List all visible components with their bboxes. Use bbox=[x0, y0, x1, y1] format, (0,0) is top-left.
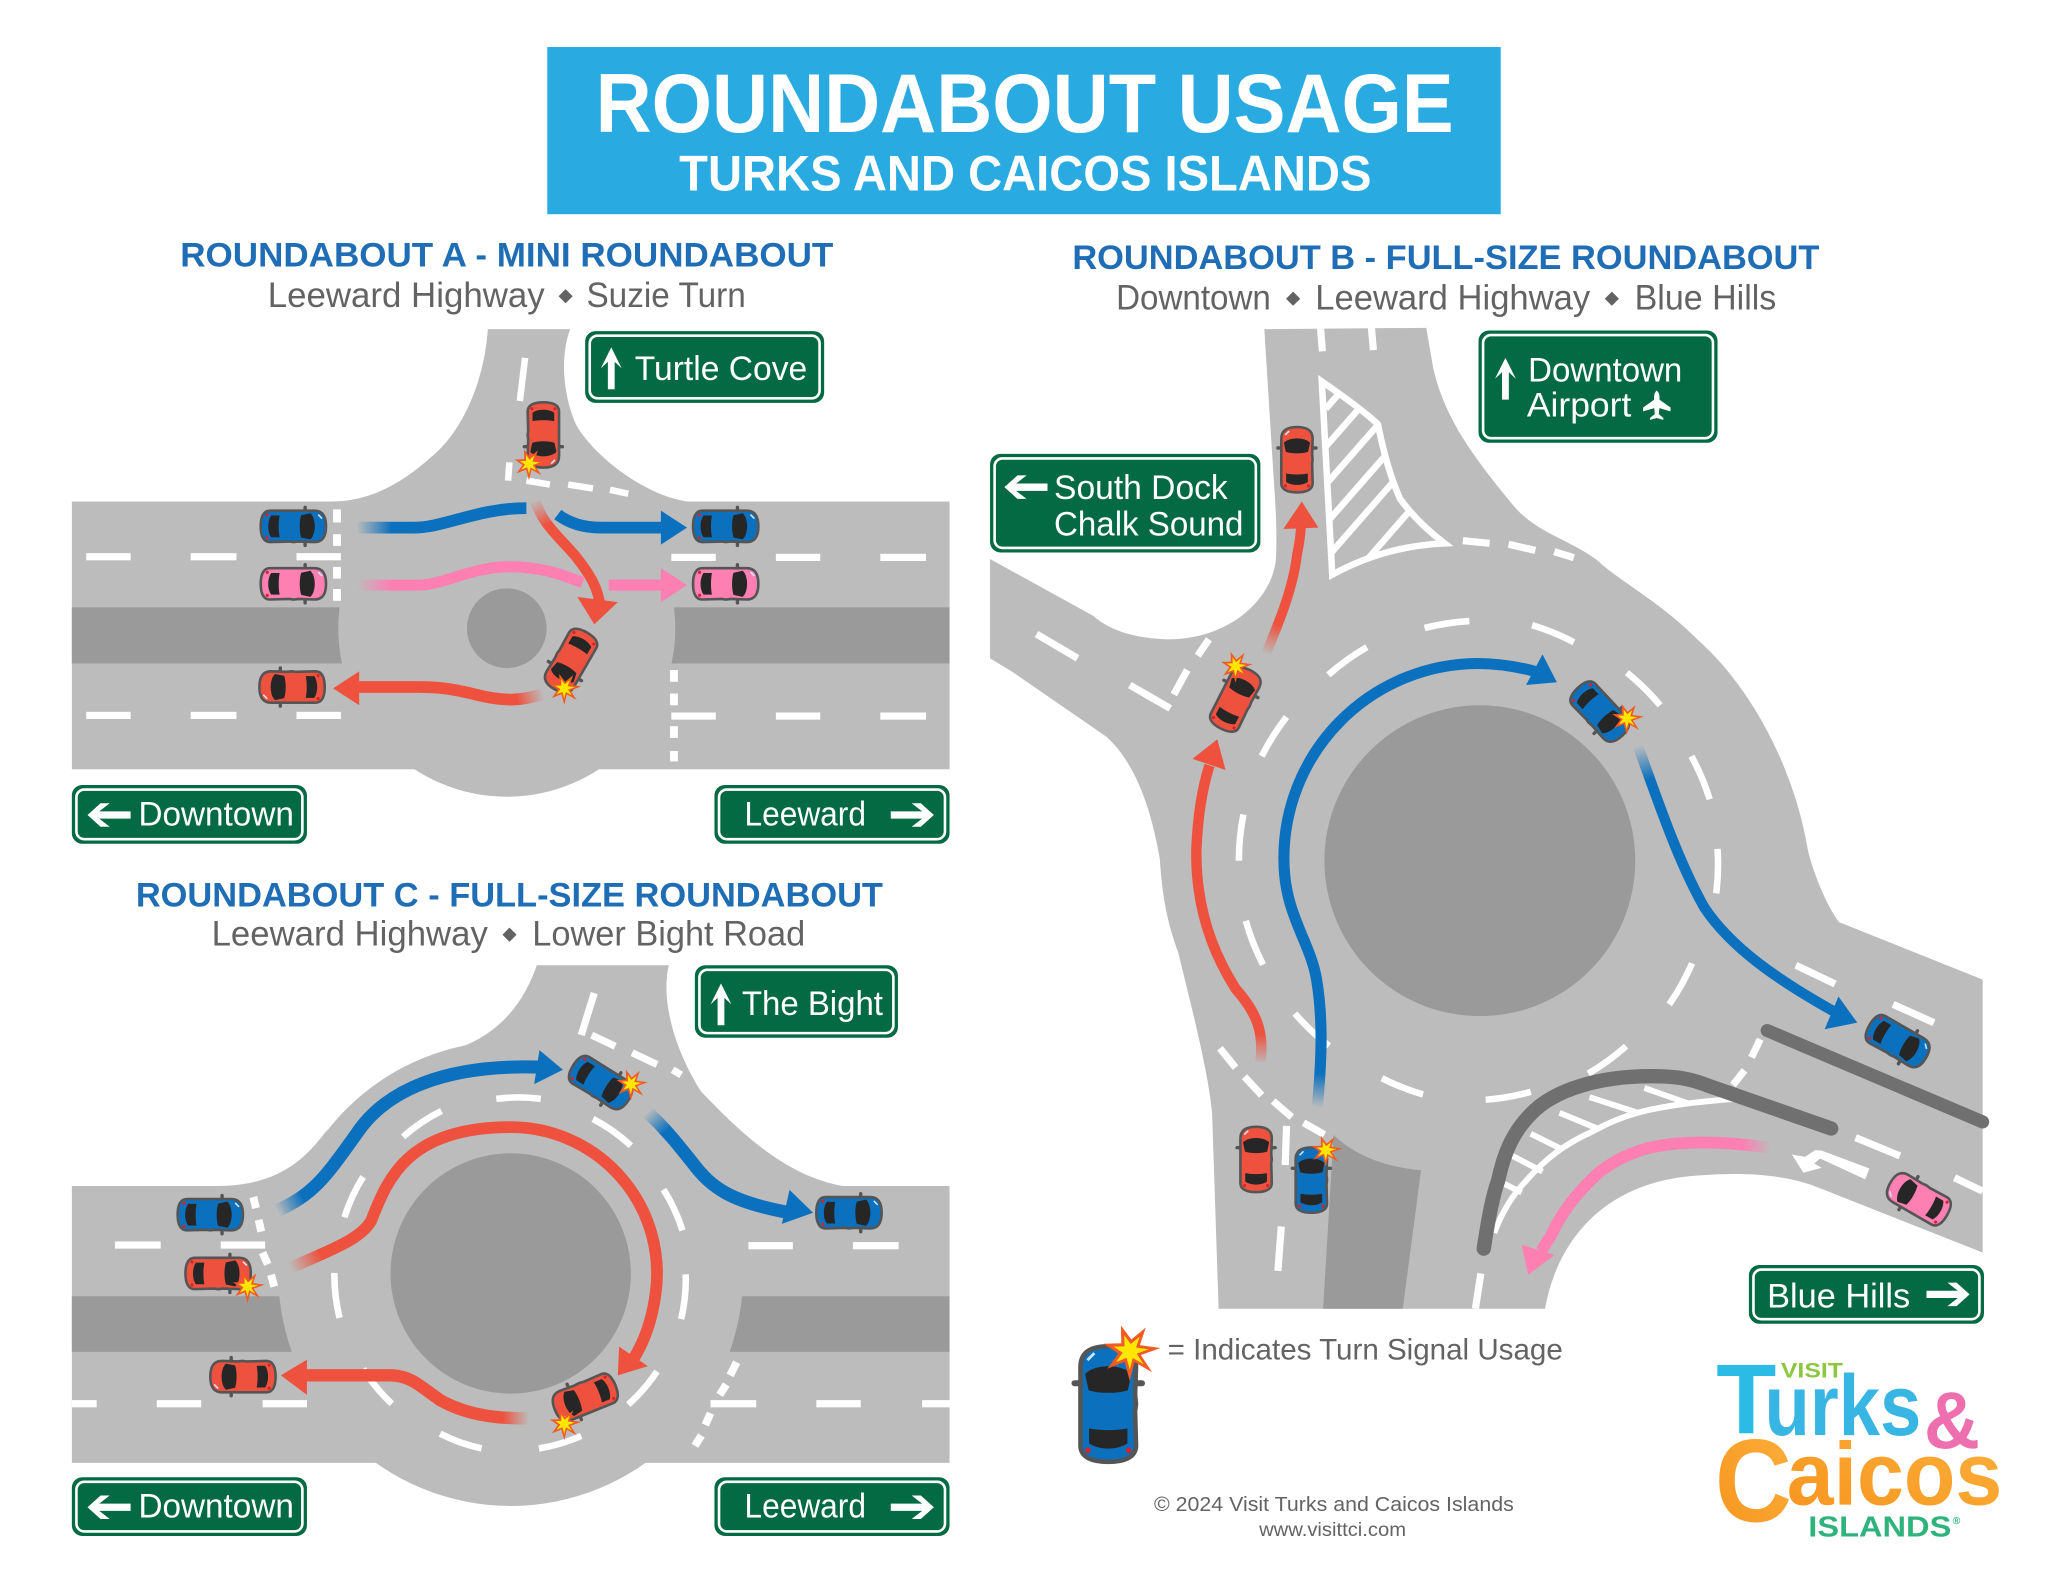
sign: Downtown Airport: Downtown bbox=[1528, 351, 1682, 389]
sign: South Dock Chalk Sound: South Dock bbox=[1054, 469, 1229, 507]
car: blue south B bbox=[1292, 1147, 1330, 1213]
sign: The Bight: The Bight bbox=[742, 985, 883, 1023]
sign: Downtown C: Downtown bbox=[138, 1488, 294, 1526]
heading A: ROUNDABOUT A - MINI ROUNDABOUT bbox=[180, 236, 834, 274]
turn arrow marking bbox=[1792, 1150, 1869, 1179]
logo: Visit Turks & Caicos Islands: ® bbox=[1953, 1516, 1961, 1527]
car: pink west A bbox=[261, 565, 326, 603]
sign: South Dock Chalk Sound: Chalk Sound bbox=[1054, 506, 1243, 544]
sign: Leeward A: Leeward bbox=[744, 795, 866, 833]
ring lane markings C bbox=[334, 1097, 686, 1448]
arrow: red entering B bbox=[1192, 739, 1261, 1062]
logo: Visit Turks & Caicos Islands: & bbox=[1924, 1376, 1980, 1466]
subheading A bbox=[268, 276, 746, 315]
arrow: pink exit B bbox=[1522, 1143, 1771, 1275]
subtitle: TURKS AND CAICOS ISLANDS bbox=[679, 146, 1371, 202]
subheading B: ◆ bbox=[1286, 287, 1300, 308]
subheading C: Lower Bight Road bbox=[532, 915, 805, 954]
sign: Turtle Cove: Turtle Cove bbox=[635, 350, 807, 388]
sign: Downtown A: Downtown bbox=[138, 795, 294, 833]
sign: Downtown A bbox=[72, 785, 307, 844]
car: blue west A bbox=[261, 507, 326, 545]
curb: east median B bbox=[1767, 1031, 1983, 1122]
curb: south splitter B bbox=[1484, 1076, 1831, 1249]
ring lane markings B bbox=[1239, 621, 1718, 1100]
sign: Downtown C bbox=[72, 1477, 307, 1536]
arrow: red entering A bbox=[536, 502, 618, 624]
legend: turn signal bbox=[1074, 1325, 1563, 1462]
subheading B: ◆ bbox=[1605, 287, 1619, 308]
road surface A bbox=[72, 329, 950, 797]
signal: red north A bbox=[514, 449, 546, 480]
car: blue east A bbox=[693, 507, 758, 545]
copyright: www.visittci.com bbox=[1258, 1519, 1406, 1541]
signal: red west B bbox=[1221, 652, 1253, 683]
icon: legend car bbox=[1074, 1346, 1142, 1462]
logo: Visit Turks & Caicos Islands: aicos bbox=[1787, 1425, 2002, 1524]
logo: Visit Turks & Caicos Islands: urks bbox=[1765, 1358, 1921, 1454]
subheading A: ◆ bbox=[559, 284, 573, 305]
arrow: red exit C bbox=[281, 1360, 529, 1418]
car: red west A bbox=[259, 668, 325, 706]
arrow: blue through A bbox=[357, 508, 687, 545]
car: red west B bbox=[1204, 662, 1267, 737]
hatched island north B bbox=[1318, 375, 1454, 580]
subheading C bbox=[212, 915, 805, 954]
signal: blue north C bbox=[616, 1070, 648, 1101]
sign: Leeward A bbox=[714, 785, 950, 844]
subheading B: Blue Hills bbox=[1635, 279, 1776, 318]
logo: Visit Turks & Caicos Islands: ISLANDS bbox=[1808, 1512, 1951, 1544]
car: red west C bbox=[185, 1254, 251, 1293]
sign: Downtown Airport: Airport bbox=[1527, 387, 1632, 425]
car: red north A bbox=[524, 402, 562, 468]
arrow: blue exit C bbox=[648, 1112, 813, 1224]
arrow: red around circle C bbox=[290, 1127, 657, 1375]
sign: Downtown Airport bbox=[1479, 330, 1718, 443]
arrow: blue entering C bbox=[277, 1050, 563, 1211]
title: ROUNDABOUT USAGE bbox=[596, 56, 1454, 150]
heading B: ROUNDABOUT B - FULL-SIZE ROUNDABOUT bbox=[1072, 239, 1820, 277]
road surface C bbox=[72, 965, 950, 1506]
arrow: pink through A bbox=[357, 567, 687, 602]
sign: Blue Hills: Blue Hills bbox=[1767, 1277, 1910, 1315]
car: blue west C bbox=[178, 1196, 243, 1234]
subheading A: Suzie Turn bbox=[586, 276, 746, 315]
copyright bbox=[1154, 1494, 1514, 1541]
car: pink east A bbox=[693, 565, 758, 603]
car: red south B bbox=[1237, 1127, 1275, 1192]
arrow: blue around circle B bbox=[1284, 654, 1557, 1108]
road surface B bbox=[990, 328, 1983, 1309]
car: red lower C bbox=[210, 1358, 276, 1396]
signal: blue ring B bbox=[1612, 704, 1644, 735]
car: red south C bbox=[548, 1368, 623, 1427]
title banner bbox=[547, 47, 1501, 214]
car: blue east C bbox=[816, 1194, 882, 1232]
car: pink east B bbox=[1881, 1166, 1956, 1232]
logo: Visit Turks & Caicos Islands bbox=[1715, 1344, 2002, 1547]
arrow: red exit A bbox=[333, 671, 543, 705]
hatched area south B bbox=[1494, 1088, 1750, 1233]
panel: roundabout B bbox=[990, 239, 1984, 1324]
subheading A: Leeward Highway bbox=[268, 276, 545, 315]
sign: Leeward C: Leeward bbox=[744, 1488, 866, 1526]
sign: The Bight bbox=[695, 965, 898, 1038]
car: red in circle A bbox=[538, 623, 604, 699]
heading C: ROUNDABOUT C - FULL-SIZE ROUNDABOUT bbox=[136, 876, 883, 914]
car: red north B bbox=[1278, 427, 1316, 492]
signal: red south C bbox=[550, 1409, 581, 1440]
sign: Blue Hills bbox=[1749, 1265, 1984, 1324]
legend text: = Indicates Turn Signal Usage bbox=[1168, 1334, 1563, 1367]
copyright: © 2024 Visit Turks and Caicos Islands bbox=[1154, 1494, 1514, 1516]
subheading C: Leeward Highway bbox=[212, 915, 488, 954]
car: blue north C bbox=[563, 1049, 639, 1116]
arrow: red exit B bbox=[1266, 502, 1318, 654]
signal: red in circle A bbox=[550, 674, 581, 705]
car: blue east B bbox=[1860, 1009, 1936, 1074]
subheading B bbox=[1116, 279, 1776, 318]
sign: South Dock Chalk Sound bbox=[990, 454, 1260, 552]
subheading B: Downtown bbox=[1116, 279, 1271, 318]
panel: roundabout A bbox=[72, 236, 950, 844]
sign: Turtle Cove bbox=[585, 331, 824, 403]
signal: blue south B bbox=[1311, 1136, 1343, 1167]
car: blue ring B bbox=[1564, 675, 1636, 749]
signal: red west C bbox=[233, 1272, 265, 1303]
arrow: blue exit B bbox=[1638, 746, 1857, 1029]
subheading C: ◆ bbox=[502, 923, 516, 944]
logo: Visit Turks & Caicos Islands: C bbox=[1715, 1416, 1792, 1547]
subheading B: Leeward Highway bbox=[1315, 279, 1591, 318]
panel: roundabout C bbox=[72, 876, 950, 1536]
logo: Visit Turks & Caicos Islands: VISIT bbox=[1781, 1357, 1843, 1382]
icon: airplane bbox=[1643, 391, 1671, 420]
sign: Leeward C bbox=[714, 1477, 950, 1536]
icon: legend starburst bbox=[1104, 1325, 1161, 1381]
logo: Visit Turks & Caicos Islands: T bbox=[1716, 1344, 1776, 1455]
